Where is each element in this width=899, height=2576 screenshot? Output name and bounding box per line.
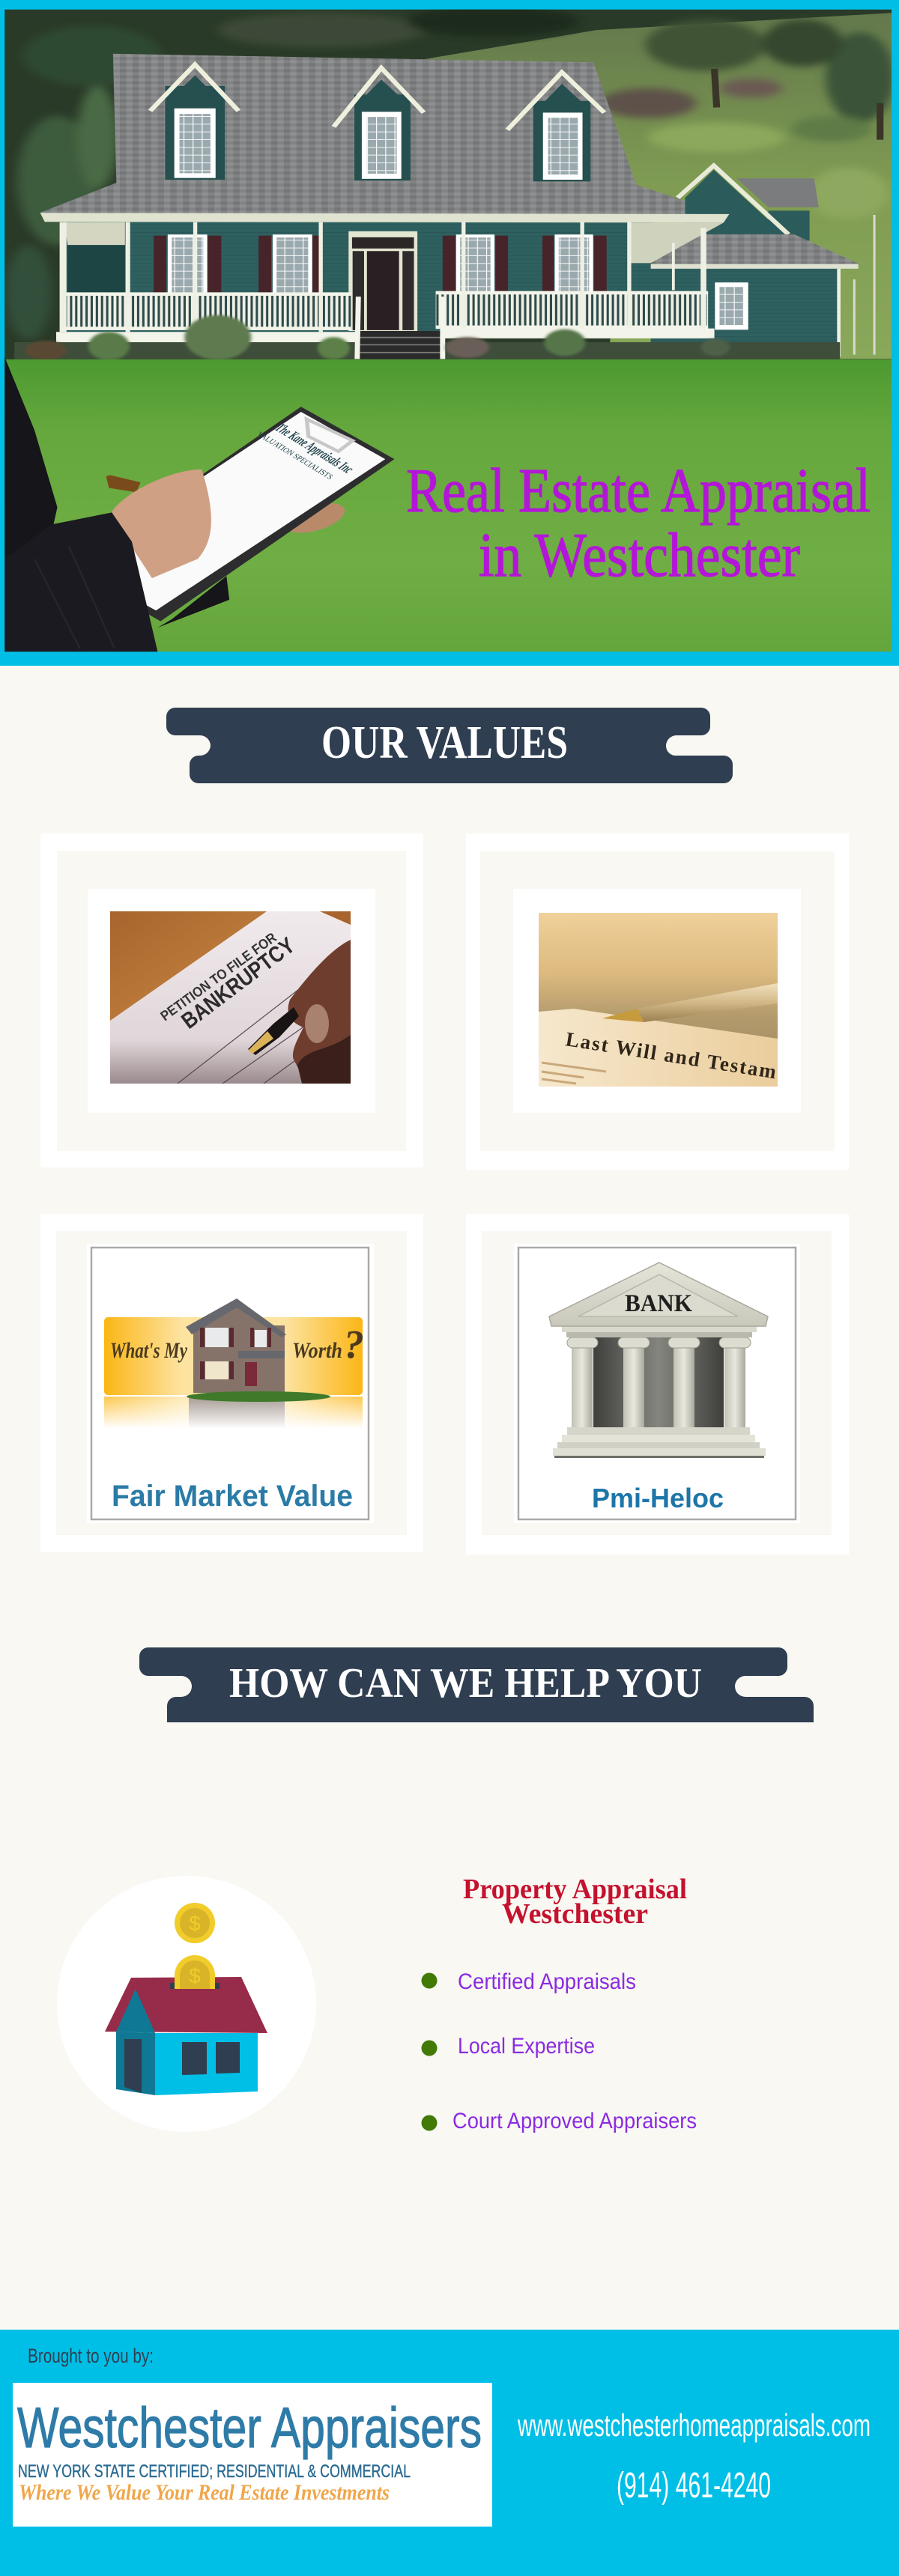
right dormer <box>507 72 605 181</box>
logo panel <box>13 2383 492 2527</box>
door <box>245 1362 257 1386</box>
roof <box>105 1977 267 2033</box>
wing gable <box>685 169 769 234</box>
background tree mass <box>4 10 892 362</box>
last will photo <box>539 913 778 1087</box>
footer <box>0 2330 899 2576</box>
wing wall <box>650 268 839 342</box>
image border <box>518 1248 796 1519</box>
porch left dark <box>67 245 125 294</box>
hillside <box>419 13 892 359</box>
sleeve highlight <box>34 546 115 649</box>
how can we help banner <box>139 1647 814 1722</box>
form lines <box>178 979 351 1084</box>
photo mat <box>88 889 375 1113</box>
banner shape <box>166 708 733 783</box>
bankruptcy text: BANKRUPTCY <box>177 933 300 1034</box>
wing post <box>837 269 841 357</box>
center dormer <box>333 68 424 180</box>
card: pmi heloc <box>466 1214 849 1555</box>
columns <box>572 1340 745 1429</box>
card: bankruptcy <box>40 833 423 1167</box>
item: local expertise: Local Expertise <box>458 2034 595 2059</box>
porch wall <box>63 222 653 333</box>
card: fair market value <box>40 1214 423 1552</box>
orange banner <box>104 1317 363 1395</box>
hero photo scene <box>4 6 895 651</box>
lower coin: $ <box>189 1964 201 1987</box>
front wall <box>155 2033 258 2095</box>
service list <box>421 1969 697 2133</box>
card frame <box>466 833 849 1170</box>
heading line one: Property Appraisal <box>463 1874 687 1905</box>
side door <box>124 2039 142 2093</box>
will text: Last Will and Testam <box>564 1027 778 1083</box>
house gable <box>193 1304 283 1334</box>
wing wall top <box>769 210 810 240</box>
wing upper roof <box>736 178 819 207</box>
worth text: Worth <box>292 1338 342 1363</box>
card inner panel <box>482 1231 832 1535</box>
fair market value label: Fair Market Value <box>112 1480 353 1513</box>
hero panel: house photo with cyan frame <box>0 0 899 666</box>
company name: The Kane Appraisals Inc <box>272 421 357 476</box>
steps <box>553 1427 766 1458</box>
icon: house piggy bank in circle <box>57 1876 316 2132</box>
house roof <box>186 1298 286 1337</box>
shrubs <box>25 315 730 360</box>
logo background <box>13 2383 492 2527</box>
petition text: PETITION TO FILE FOR <box>157 929 279 1024</box>
porch overhang right <box>631 222 724 263</box>
pediment inner <box>578 1275 738 1316</box>
wood desk <box>110 911 267 1021</box>
bank text: BANK <box>625 1290 692 1317</box>
hillside foliage <box>6 6 895 340</box>
bullet three <box>421 2115 438 2131</box>
title line two: in Westchester <box>479 520 800 590</box>
right window <box>216 2042 240 2074</box>
lawn <box>4 359 892 651</box>
banner title: HOW CAN WE HELP YOU <box>229 1660 702 1707</box>
pen nib <box>248 1031 273 1054</box>
heading line two: Westchester <box>502 1898 648 1930</box>
pen <box>106 475 140 492</box>
hero cyan frame <box>0 0 899 666</box>
pediment <box>549 1263 768 1326</box>
card frame <box>466 1214 849 1555</box>
writing hand <box>112 470 211 578</box>
bullet two <box>421 2040 438 2056</box>
birch trunks <box>854 215 874 355</box>
logo name: Westchester Appraisers <box>17 2396 482 2460</box>
wing window <box>715 282 748 329</box>
card frame <box>40 833 423 1167</box>
small house <box>186 1298 330 1402</box>
wing gable trim <box>678 165 788 234</box>
dark jacket body <box>4 357 58 559</box>
clipboard text <box>258 424 352 479</box>
image background <box>87 1244 374 1523</box>
clipboard <box>147 407 394 622</box>
finger shadow <box>297 1035 351 1084</box>
clipboard paper <box>133 412 385 611</box>
wood corner <box>320 911 351 925</box>
our values banner <box>166 708 733 783</box>
jacket cuff behind <box>157 576 229 628</box>
card inner panel <box>56 1231 407 1535</box>
far hand <box>291 503 345 533</box>
pen <box>248 1007 299 1055</box>
jacket sleeve <box>4 512 157 651</box>
stairs <box>357 297 443 359</box>
porch ceiling <box>64 222 125 245</box>
logo strapline: NEW YORK STATE CERTIFIED; RESIDENTIAL & COMMERCIAL <box>18 2461 411 2482</box>
bank icon <box>549 1263 768 1458</box>
porch roof <box>238 1351 285 1358</box>
clipboard clip <box>306 419 353 452</box>
card inner panel <box>57 851 406 1151</box>
card inner panel <box>480 851 835 1151</box>
upper coin <box>175 1903 215 1943</box>
item: court approved appraisers: Court Approved Appraisers <box>452 2109 697 2133</box>
railings <box>63 291 708 330</box>
white circle <box>57 1876 316 2132</box>
ground under house <box>14 342 840 359</box>
what's my text: What's My <box>110 1338 188 1363</box>
main roof <box>40 54 728 215</box>
shutters <box>154 236 607 292</box>
pmi-heloc label: Pmi-Heloc <box>592 1483 724 1513</box>
roof fascia <box>40 213 729 222</box>
side wall <box>116 2032 155 2095</box>
wing lower roof <box>651 234 860 264</box>
wing trim <box>651 264 859 269</box>
coin slot <box>170 1983 220 1989</box>
card: last will <box>466 833 849 1170</box>
pen tip <box>602 1009 644 1022</box>
capitals <box>567 1337 751 1348</box>
card frame <box>40 1214 423 1552</box>
hero title <box>406 456 871 590</box>
house walls <box>193 1325 285 1393</box>
phone: (914) 461-4240 <box>617 2466 771 2506</box>
services heading <box>463 1874 687 1930</box>
item: certified appraisals: Certified Appraisals <box>458 1969 636 1994</box>
foundation <box>56 329 715 342</box>
shutters <box>200 1328 271 1379</box>
paper <box>110 911 351 1084</box>
bankruptcy photo <box>110 911 351 1084</box>
finger tip <box>305 1004 329 1043</box>
banner title: OUR VALUES <box>321 717 568 768</box>
left dormer <box>151 64 238 180</box>
hand <box>288 940 351 1084</box>
logo tagline: Where We Value Your Real Estate Investments <box>19 2480 390 2505</box>
upper windows <box>205 1328 267 1347</box>
front door <box>348 231 417 331</box>
porch windows <box>168 234 593 292</box>
image background <box>514 1244 800 1523</box>
dark interior <box>593 1337 724 1435</box>
specialist line: VALUATION SPECIALISTS <box>255 431 335 482</box>
footer background <box>0 2330 899 2576</box>
question mark: ? <box>344 1322 364 1367</box>
brought to you by: Brought to you by: <box>28 2345 154 2367</box>
lawn <box>187 1391 330 1402</box>
banner shape <box>139 1647 814 1722</box>
photo mat <box>513 889 801 1113</box>
upper coin: $ <box>189 1912 201 1935</box>
bullet one <box>421 1972 438 1989</box>
porch columns <box>60 222 706 332</box>
lower coin <box>175 1955 215 1989</box>
image border <box>91 1248 369 1519</box>
tree trunks <box>715 69 880 140</box>
banner reflection <box>103 1397 364 1429</box>
pen barrel <box>638 983 778 1022</box>
fine text <box>542 1063 606 1084</box>
background <box>539 913 778 1087</box>
document <box>539 1009 778 1087</box>
side gable <box>116 1989 155 2033</box>
entablature <box>562 1326 757 1337</box>
lower window <box>205 1361 228 1379</box>
left window <box>182 2042 207 2075</box>
